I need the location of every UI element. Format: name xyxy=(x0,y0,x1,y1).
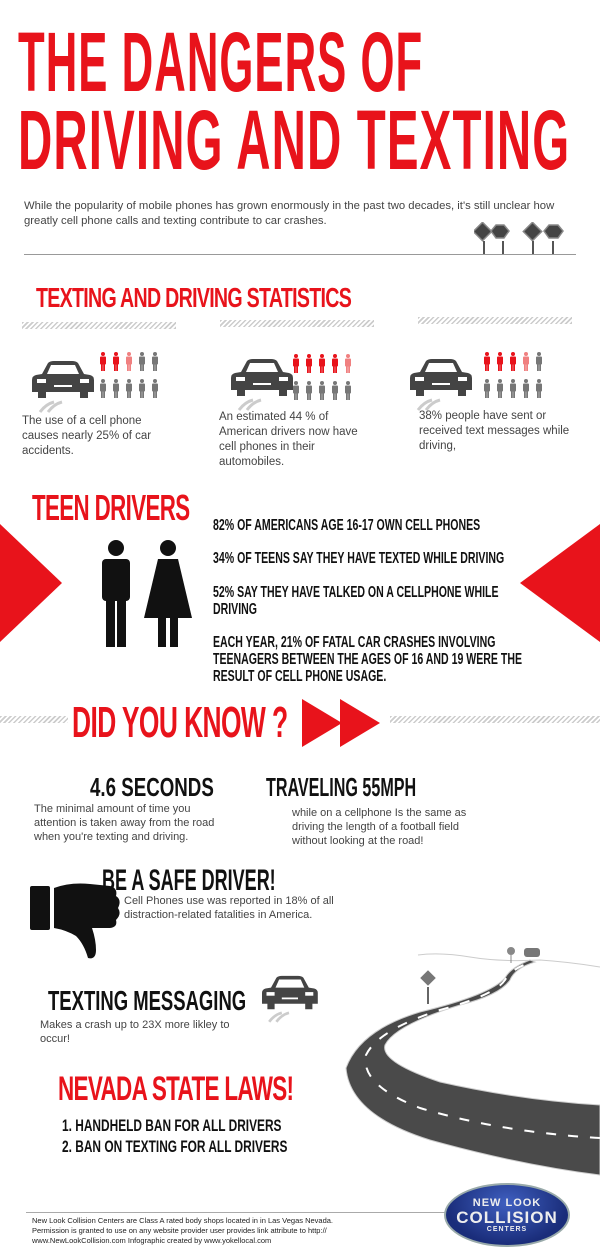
logo: CENTERS xyxy=(487,1226,527,1233)
logo xyxy=(444,1183,570,1247)
text: teen stats: 34% OF TEENS SAY THEY HAVE TEXTED WHILE DRIVING xyxy=(213,550,504,567)
heading: did you know: DID YOU KNOW ? xyxy=(72,698,288,747)
footer text: Permission is granted to use on any website provider user provides link attribute to http:// xyxy=(32,1226,327,1235)
icon: man and woman xyxy=(102,540,192,647)
panel: stat 3: 38% people have sent or received text messages while driving, xyxy=(419,410,569,452)
logo: NEW LOOK xyxy=(473,1197,541,1209)
icon: car xyxy=(262,976,318,1022)
footer text: New Look Collision Centers are Class A rated body shops located in in Las Vegas Nevada. xyxy=(32,1216,333,1225)
panel: stat 1 xyxy=(22,352,158,457)
text: teen stats: TEENAGERS BETWEEN THE AGES OF 16 AND 19 WERE THE xyxy=(213,651,522,668)
footer text xyxy=(32,1216,333,1245)
title: DRIVING AND TEXTING xyxy=(18,93,570,187)
list: laws: 2. BAN ON TEXTING FOR ALL DRIVERS xyxy=(62,1137,287,1156)
fact: traveling 55mph: while on a cellphone Is the same as driving the length of a football field without looking at the road! xyxy=(292,807,466,847)
title xyxy=(18,15,570,187)
text: teen stats: DRIVING xyxy=(213,601,257,618)
icon: thumbs down xyxy=(30,884,120,958)
fact: texting messaging: Makes a crash up to 23X more likley to occur! xyxy=(40,1019,230,1045)
fact: be a safe driver xyxy=(102,864,334,921)
fact: 4.6 seconds: The minimal amount of time you attention is taken away from the road when you're texting and driving. xyxy=(34,803,214,843)
text: teen stats: EACH YEAR, 21% OF FATAL CAR CRASHES INVOLVING xyxy=(213,634,495,651)
fact: be a safe driver: BE A SAFE DRIVER! xyxy=(102,864,276,897)
panel: stat 1: The use of a cell phone causes nearly 25% of car accidents. xyxy=(22,415,151,457)
fact: traveling 55mph xyxy=(266,772,466,847)
arrow: left red triangle xyxy=(0,524,62,642)
text: teen stats xyxy=(213,517,522,685)
fact: traveling 55mph: TRAVELING 55MPH xyxy=(266,772,416,802)
footer text: www.NewLookCollision.com Infographic created by www.yokellocal.com xyxy=(32,1236,271,1245)
heading: teen drivers: TEEN DRIVERS xyxy=(32,487,190,528)
title: THE DANGERS OF xyxy=(18,15,423,109)
text: teen stats: 82% OF AMERICANS AGE 16-17 OWN CELL PHONES xyxy=(213,517,480,534)
panel: stat 3 xyxy=(410,352,569,452)
list: laws xyxy=(62,1116,287,1156)
panel: stat 2 xyxy=(219,354,358,468)
fact: texting messaging: TEXTING MESSAGING xyxy=(48,985,246,1016)
heading: nevada state laws: NEVADA STATE LAWS! xyxy=(58,1070,293,1108)
arrow: double play xyxy=(302,699,380,747)
heading: texting and driving statistics: TEXTING AND DRIVING STATISTICS xyxy=(36,282,351,313)
arrow: right red triangle xyxy=(520,524,600,642)
fact: 4.6 seconds: 4.6 SECONDS xyxy=(90,772,214,802)
fact: be a safe driver: Cell Phones use was reported in 18% of all distraction-related fatalities in America. xyxy=(124,895,334,921)
illustration: winding road xyxy=(346,947,600,1176)
fact: texting messaging xyxy=(40,985,246,1045)
list: laws: 1. HANDHELD BAN FOR ALL DRIVERS xyxy=(62,1116,282,1135)
icon: road signs xyxy=(474,222,564,254)
fact: 4.6 seconds xyxy=(34,772,214,843)
text: teen stats: RESULT OF CELL PHONE USAGE. xyxy=(213,668,386,685)
panel: stat 2: An estimated 44 % of American drivers now have cell phones in their automobiles. xyxy=(219,411,358,468)
text: teen stats: 52% SAY THEY HAVE TALKED ON A CELLPHONE WHILE xyxy=(213,584,499,601)
logo: COLLISION xyxy=(456,1208,558,1227)
intro text: While the popularity of mobile phones has grown enormously in the past two decades, it's still unclear how greatly cell phone calls and texting contribute to car crashes. xyxy=(24,200,554,227)
